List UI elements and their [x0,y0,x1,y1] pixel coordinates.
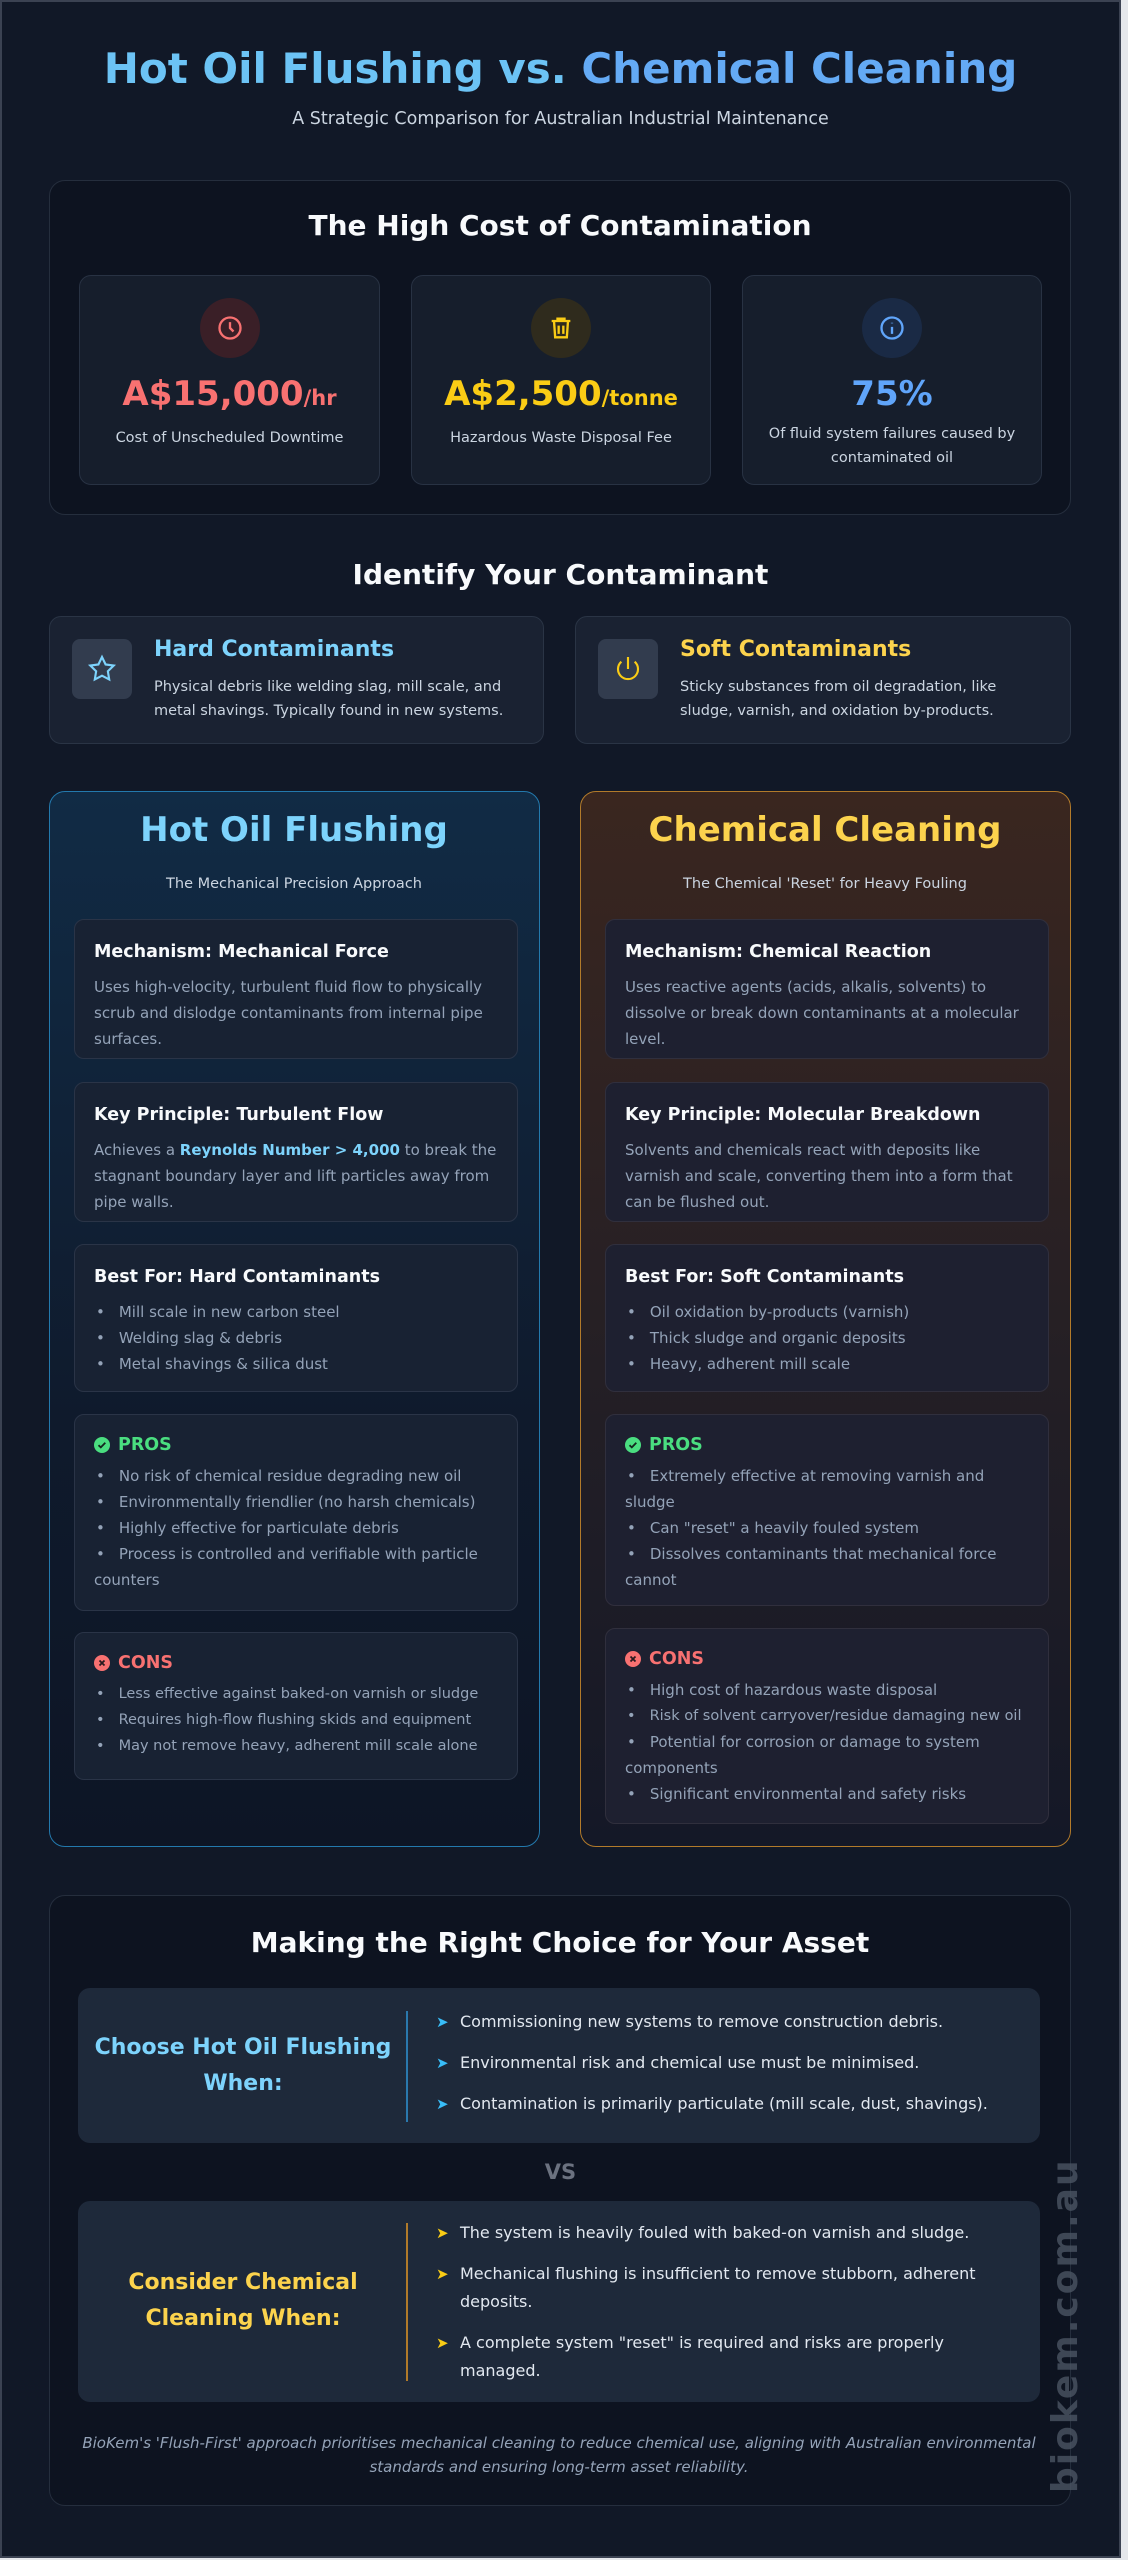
card: cons: Potential for corrosion or damage to system components [625,1733,980,1777]
card: pros: Environmentally friendlier (no harsh chemicals) [119,1493,475,1511]
card: key principle: Key Principle: Turbulent Flow [94,1105,383,1125]
card: best for: Metal shavings & silica dust [119,1355,328,1373]
stat: 75%: Of fluid system failures caused by contaminated oil [769,426,1015,466]
heading: identify: Identify Your Contaminant [353,558,768,591]
stat: waste fee: A$2,500/tonne [444,374,678,414]
card: best for: Heavy, adherent mill scale [650,1355,850,1373]
title: Hot Oil Flushing vs. Chemical Cleaning [104,44,1017,93]
card: soft contaminants: Sticky substances from oil degradation, like sludge, varnish, and oxidation by-products. [680,679,996,719]
vs label: VS [545,2160,576,2184]
card: best for [74,1244,518,1392]
card: mechanism [74,919,518,1059]
card: soft contaminants [575,616,1071,744]
card: mechanism: Mechanism: Chemical Reaction [625,942,931,962]
list: chemical criteria: Mechanical flushing is insufficient to remove stubborn, adherent deposits. [460,2264,976,2311]
card: best for: Thick sludge and organic deposits [650,1329,906,1347]
card: pros [74,1414,518,1611]
stat: waste fee: Hazardous Waste Disposal Fee [450,430,672,446]
box: choose hot oil flushing [78,1988,1040,2143]
list: chemical criteria: ➤ [436,2334,449,2352]
card: pros: Extremely effective at removing varnish and sludge [625,1467,984,1511]
stat: downtime [79,275,380,485]
card: cons: CONS [649,1649,704,1669]
list: flushing criteria: ➤ [436,2095,449,2113]
card: pros: Highly effective for particulate debris [119,1519,399,1537]
card: mechanism: Mechanism: Mechanical Force [94,942,389,962]
card: pros: Process is controlled and verifiable with particle counters [94,1545,478,1589]
card: best for [605,1244,1049,1392]
card: best for: Best For: Hard Contaminants [94,1267,380,1287]
list: chemical criteria: ➤ [436,2265,449,2283]
card: pros [605,1414,1049,1606]
stat: downtime: Cost of Unscheduled Downtime [116,430,343,446]
card: cons: Significant environmental and safety risks [650,1785,966,1803]
panel: chemical cleaning [580,791,1071,1847]
box: choose hot oil flushing: Choose Hot Oil Flushing When: [95,2035,391,2096]
subtitle: A Strategic Comparison for Australian Industrial Maintenance [292,109,829,129]
list: chemical criteria: A complete system "reset" is required and risks are properly managed. [460,2333,944,2380]
card: soft contaminants: Soft Contaminants [680,637,911,662]
list: flushing criteria: Contamination is primarily particulate (mill scale, dust, shavings). [460,2094,988,2113]
panel: making the right choice [49,1895,1071,2506]
panel: hot oil flushing: The Mechanical Precision Approach [166,876,422,892]
card: cons [605,1628,1049,1824]
card: mechanism: Uses high-velocity, turbulent fluid flow to physically scrub and dislodge contaminants from internal pipe surfaces. [94,978,483,1048]
icon: power [598,639,658,699]
stat: 75% [742,275,1042,485]
panel: hot oil flushing [49,791,540,1847]
list: flushing criteria [436,2012,988,2113]
list: flushing criteria: Environmental risk and chemical use must be minimised. [460,2053,919,2072]
card: key principle: Key Principle: Molecular Breakdown [625,1105,981,1125]
card: best for: Oil oxidation by-products (varnish) [650,1303,909,1321]
icon: trash [531,298,591,358]
column title: Hot Oil Flushing [140,810,448,850]
stat: 75%: 75% [851,374,933,414]
list: flushing criteria: ➤ [436,2013,449,2031]
card: cons: Less effective against baked-on varnish or sludge [119,1686,478,1702]
heading: choice: Making the Right Choice for Your Asset [251,1926,869,1959]
card: key principle: Achieves a Reynolds Number > 4,000 to break the stagnant boundary layer and lift particles away from pipe walls. [94,1141,496,1211]
icon: star [72,639,132,699]
card: pros: Can "reset" a heavily fouled system [650,1519,919,1537]
stat: downtime: A$15,000/hr [122,374,337,414]
card: hard contaminants [49,616,544,744]
card: cons: Requires high-flow flushing skids and equipment [119,1712,471,1728]
icon: clock [200,298,260,358]
stat: waste fee [411,275,711,485]
card: pros: Dissolves contaminants that mechanical force cannot [625,1545,997,1589]
card: key principle: Solvents and chemicals react with deposits like varnish and scale, converting them into a form that can be flushed out. [625,1141,1013,1211]
card: mechanism [605,919,1049,1059]
card: best for: Best For: Soft Contaminants [625,1267,904,1287]
box: consider chemical cleaning: Consider Chemical Cleaning When: [128,2270,358,2331]
column title: Chemical Cleaning [649,810,1001,850]
text: biokem.com.au [1045,2158,1086,2493]
card: cons: High cost of hazardous waste disposal [650,1681,937,1699]
card: cons: May not remove heavy, adherent mill scale alone [119,1738,478,1754]
card: cons: CONS [118,1653,173,1673]
box: consider chemical cleaning [78,2201,1040,2402]
card: mechanism: Uses reactive agents (acids, alkalis, solvents) to dissolve or break down contaminants at a molecular level. [625,978,1019,1048]
card: pros: PROS [649,1435,703,1455]
card: key principle [74,1082,518,1222]
icon: info [862,298,922,358]
panel: chemical cleaning: The Chemical 'Reset' for Heavy Fouling [683,876,967,892]
heading: cost: The High Cost of Contamination [308,209,812,242]
panel: high cost of contamination [49,180,1071,515]
list: chemical criteria: The system is heavily fouled with baked-on varnish and sludge. [460,2223,969,2242]
card: best for: Mill scale in new carbon steel [119,1303,340,1321]
card: hard contaminants: Hard Contaminants [154,637,394,662]
list: chemical criteria [436,2223,976,2380]
card: cons: Risk of solvent carryover/residue damaging new oil [650,1708,1022,1724]
list: flushing criteria: ➤ [436,2054,449,2072]
card: pros: PROS [118,1435,172,1455]
card: pros: No risk of chemical residue degrading new oil [119,1467,461,1485]
card: key principle [605,1082,1049,1222]
card: best for: Welding slag & debris [119,1329,282,1347]
list: flushing criteria: Commissioning new systems to remove construction debris. [460,2012,943,2031]
list: chemical criteria: ➤ [436,2224,449,2242]
card: hard contaminants: Physical debris like welding slag, mill scale, and metal shavings. Typically found in new systems. [154,679,503,719]
footer note: BioKem's 'Flush-First' approach prioritises mechanical cleaning to reduce chemical use, aligning with Australian environmental standards and ensuring long-term asset reliability. [82,2434,1036,2476]
card: cons [74,1632,518,1780]
